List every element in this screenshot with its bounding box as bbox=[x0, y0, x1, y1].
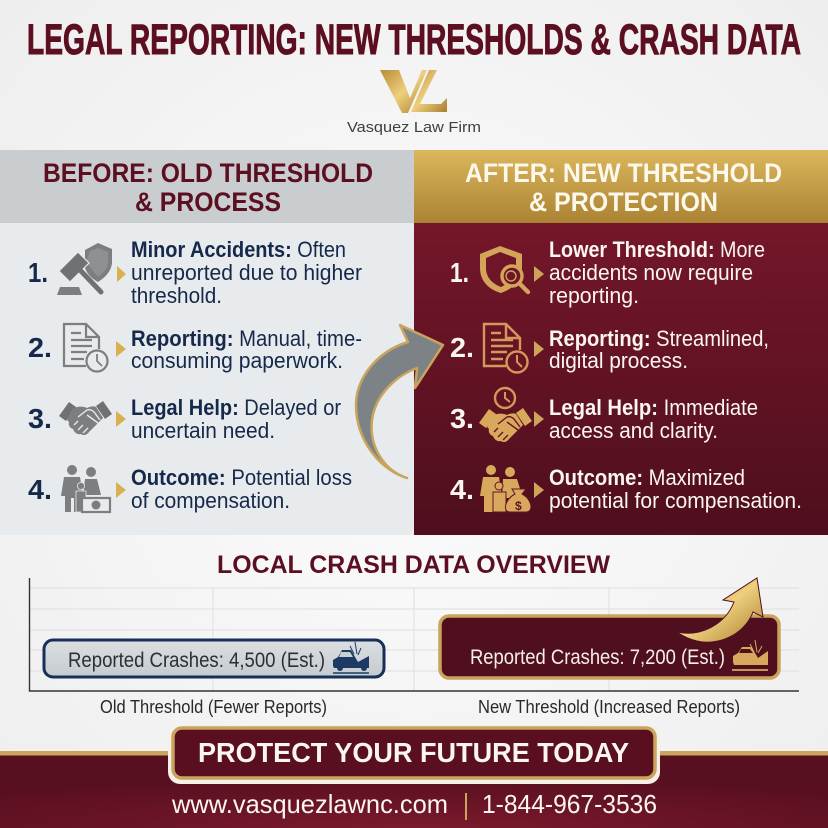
item 4 before bbox=[28, 465, 352, 513]
contact details bbox=[171, 789, 657, 820]
item 3 before: Legal Help: Delayed or bbox=[131, 395, 341, 420]
item 2 after: digital process. bbox=[549, 348, 688, 373]
axis label: new threshold: New Threshold (Increased Reports) bbox=[478, 697, 740, 717]
item 4 before: 4. bbox=[28, 474, 52, 505]
item 2 before: consuming paperwork. bbox=[131, 348, 343, 373]
item 4 after: $ bbox=[515, 499, 522, 513]
item 1 after: Lower Threshold: More bbox=[549, 237, 765, 262]
item 3 before: 3. bbox=[28, 403, 52, 434]
item 2 after: 2. bbox=[450, 332, 474, 363]
arrow: before to after bbox=[356, 325, 443, 478]
panel: before list bbox=[0, 223, 414, 535]
item 3 before: uncertain need. bbox=[131, 418, 275, 443]
bar: new threshold bbox=[440, 616, 779, 678]
item 3 after: access and clarity. bbox=[549, 418, 718, 443]
bar: new threshold: Reported Crashes: 7,200 (Est.) bbox=[470, 646, 725, 669]
panel: before header: & PROCESS bbox=[135, 187, 281, 217]
item 4 after: potential for compensation. bbox=[549, 488, 802, 513]
item 2 after bbox=[450, 324, 769, 373]
item 1 after: reporting. bbox=[549, 283, 639, 308]
panel: before header bbox=[0, 150, 414, 223]
item 2 before: Reporting: Manual, time- bbox=[131, 326, 362, 351]
arrow: rising reports bbox=[677, 578, 763, 642]
item 1 before: unreported due to higher bbox=[131, 260, 362, 285]
panel: after list bbox=[414, 223, 828, 535]
axis label: old threshold: Old Threshold (Fewer Reports) bbox=[100, 697, 327, 717]
heading: local crash data: LOCAL CRASH DATA OVERVIEW bbox=[217, 551, 610, 579]
contact details: www.vasquezlawnc.com bbox=[171, 789, 448, 819]
panel: after header: & PROTECTION bbox=[529, 187, 718, 217]
panel: before header: BEFORE: OLD THRESHOLD bbox=[43, 158, 373, 188]
item 2 before: 2. bbox=[28, 332, 52, 363]
item 1 after: 1. bbox=[450, 257, 469, 288]
panel: after header bbox=[414, 150, 828, 223]
item 1 before: 1. bbox=[28, 257, 48, 288]
item 4 after bbox=[450, 465, 802, 513]
item 1 after bbox=[450, 237, 765, 308]
logo: Vasquez Law Firm bbox=[347, 70, 481, 136]
item 3 after: 3. bbox=[450, 403, 474, 434]
footer band bbox=[0, 751, 828, 828]
item 1 after: accidents now require bbox=[549, 260, 753, 285]
bar chart: crash data bbox=[30, 578, 799, 717]
item 1 before: threshold. bbox=[131, 283, 222, 308]
item 4 before: Outcome: Potential loss bbox=[131, 465, 352, 490]
item 3 after bbox=[450, 388, 758, 443]
item 4 before: of compensation. bbox=[131, 488, 290, 513]
logo: Vasquez Law Firm: Vasquez Law Firm bbox=[347, 120, 481, 136]
contact details: 1-844-967-3536 bbox=[482, 789, 657, 819]
item 4 after: Outcome: Maximized bbox=[549, 465, 745, 490]
item 4 after: 4. bbox=[450, 474, 474, 505]
item 1 before: Minor Accidents: Often bbox=[131, 237, 346, 262]
item 2 before bbox=[28, 324, 362, 373]
call to action button bbox=[168, 725, 660, 784]
panel: after header: AFTER: NEW THRESHOLD bbox=[465, 158, 782, 188]
item 3 after: Legal Help: Immediate bbox=[549, 395, 758, 420]
item 3 before bbox=[28, 395, 341, 443]
bar: old threshold: Reported Crashes: 4,500 (Est.) bbox=[68, 649, 325, 672]
call to action button: PROTECT YOUR FUTURE TODAY bbox=[198, 737, 629, 768]
item 2 after: Reporting: Streamlined, bbox=[549, 326, 769, 351]
item 1 before bbox=[28, 237, 362, 308]
bar: old threshold bbox=[44, 640, 384, 677]
